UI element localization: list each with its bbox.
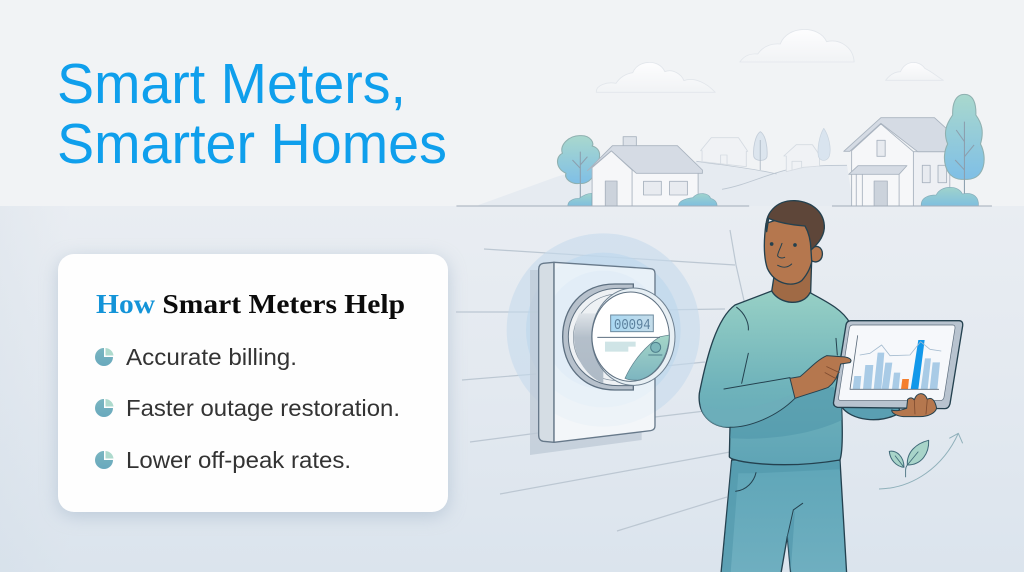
bullet: faster outage restoration: Faster outage restoration. xyxy=(126,395,400,421)
trousers xyxy=(721,460,847,572)
pointing hand xyxy=(790,356,851,398)
cloud left xyxy=(596,62,715,92)
meter housing xyxy=(539,262,655,442)
signal rings xyxy=(507,233,700,427)
info card xyxy=(58,254,448,516)
sweater xyxy=(699,291,850,465)
title: Smarter Homes xyxy=(57,112,447,176)
bushes left xyxy=(568,193,717,206)
person xyxy=(699,201,963,572)
icon: leaves with growth arrow xyxy=(879,433,963,489)
background: upper sky band xyxy=(0,0,1024,206)
neighbourhood scene xyxy=(456,29,992,206)
background: lower section xyxy=(0,206,1024,572)
smart meter xyxy=(507,233,700,455)
sweater far arm xyxy=(840,397,900,420)
distant house 1 xyxy=(701,138,748,167)
face details xyxy=(770,243,796,267)
fingers under tablet xyxy=(892,394,937,417)
card heading: How Smart Meters Help xyxy=(96,289,405,319)
distant tree 1 xyxy=(754,132,767,160)
ground line xyxy=(456,204,992,207)
bush right xyxy=(921,187,978,206)
cloud middle xyxy=(740,29,854,62)
head xyxy=(764,201,824,284)
meter teal panel xyxy=(625,335,669,380)
meter dial xyxy=(563,284,675,390)
tree left xyxy=(557,136,600,198)
neck xyxy=(772,260,812,302)
distant house 2 xyxy=(784,145,819,172)
bullet: accurate billing: Accurate billing. xyxy=(126,344,297,370)
bullet: lower off-peak rates: Lower off-peak rates. xyxy=(126,447,351,473)
distant tree 2 xyxy=(818,128,830,160)
title: Smart Meters, xyxy=(57,52,406,116)
meter LCD display: 00094 xyxy=(614,318,651,334)
house left xyxy=(587,137,702,206)
hills xyxy=(479,162,853,206)
tablet xyxy=(833,321,963,409)
house right xyxy=(844,118,950,206)
tree right xyxy=(944,94,984,205)
cloud right xyxy=(886,62,943,80)
hair xyxy=(766,201,824,250)
title xyxy=(57,52,447,176)
tablet bar chart xyxy=(853,340,940,389)
ear xyxy=(811,246,822,262)
